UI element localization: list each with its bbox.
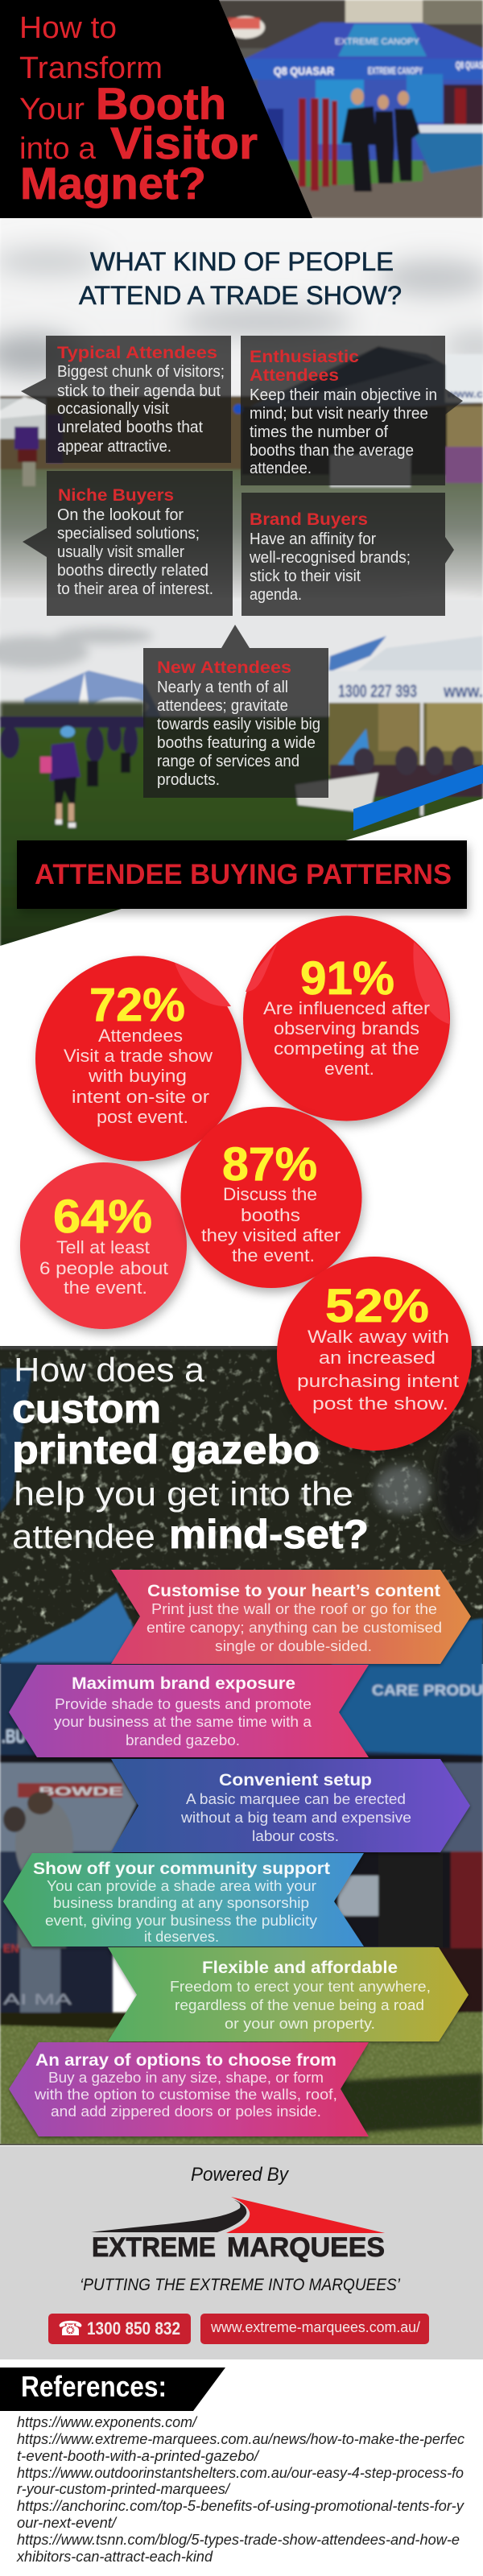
text: 87 percent: Discuss the <box>223 1184 317 1204</box>
text: reference links: xhibitors-can-attract-each-kind <box>16 2549 213 2565</box>
text: niche buyers: to their area of interest. <box>57 580 213 598</box>
button: phone: 1300 850 832 <box>87 2318 180 2339</box>
background photo: outdoor event: www.c <box>446 387 483 400</box>
heading: attendee buying patterns <box>17 840 467 909</box>
heading: custom printed gazebo question: mind-set? <box>169 1512 369 1557</box>
text: 91 percent: competing at the <box>274 1038 419 1059</box>
heading: enthusiastic attendees: Enthusiastic <box>250 348 359 366</box>
text: array of options <box>34 2070 337 2120</box>
text: customise: entire canopy; anything can be customised <box>147 1620 442 1636</box>
text: reference links: https://www.tsnn.com/blog/5-types-trade-show-attendees-and-how-e <box>17 2532 460 2548</box>
text: reference links: r-your-custom-printed-marquees/ <box>17 2481 231 2497</box>
title text: Magnet? <box>20 158 206 208</box>
heading: enthusiastic attendees <box>250 348 359 385</box>
text: 52 percent: Walk away with <box>308 1327 449 1347</box>
button: website: www.extreme-marquees.com.au/ <box>210 2319 420 2335</box>
background photo: outdoor event <box>0 218 483 959</box>
text: reference links <box>16 2414 464 2565</box>
panel: new attendees <box>143 625 328 798</box>
text: typical attendees: occasionally visit <box>57 400 169 418</box>
ribbon: customise <box>111 1570 471 1664</box>
text: reference links: our-next-event/ <box>17 2515 118 2531</box>
text: brand exposure: branded gazebo. <box>126 1732 240 1748</box>
heading: enthusiastic attendees: Attendees <box>250 366 339 385</box>
title text: How to <box>19 11 117 45</box>
ribbon: convenient setup: Convenient setup <box>219 1771 372 1790</box>
ribbon: customise: Customise to your heart’s content <box>147 1582 440 1600</box>
panel: enthusiastic attendees <box>241 336 463 485</box>
heading: niche buyers: Niche Buyers <box>58 486 174 505</box>
text: convenient setup: without a big team and expensive <box>180 1810 411 1826</box>
text: new attendees <box>157 679 320 789</box>
text: new attendees: products. <box>157 771 220 789</box>
circle: 91 percent <box>243 916 450 1121</box>
text: customise <box>147 1601 442 1654</box>
text: new attendees: range of services and <box>157 753 299 770</box>
text: niche buyers: specialised solutions; <box>57 525 200 543</box>
text: array of options: Buy a gazebo in any size, shape, or form <box>48 2070 324 2086</box>
text: 87 percent: the event. <box>232 1245 315 1265</box>
circle: 91 percent: 91% <box>300 952 394 1005</box>
text: community support <box>45 1878 317 1945</box>
text: enthusiastic attendees: booths than the average <box>250 442 414 460</box>
text: typical attendees: appear attractive. <box>57 438 171 456</box>
circle: 52 percent <box>277 1257 472 1451</box>
background photo: gazebo event <box>0 1346 483 2146</box>
header photo: trade show booth: Q8 QUASAR <box>274 64 334 77</box>
text: reference links: https://anchorinc.com/top-5-benefits-of-using-promotional-tents-for-y <box>17 2498 464 2514</box>
text: community support: event, giving your business the publicity <box>45 1913 317 1929</box>
text: niche buyers: On the lookout for <box>57 506 184 524</box>
text: flexible and affordable: regardless of the venue being a road <box>175 1997 424 2013</box>
text: convenient setup: labour costs. <box>252 1828 339 1844</box>
text: customise: Print just the wall or the roof or go for the <box>151 1601 437 1617</box>
text: 91 percent: Are influenced after <box>263 998 430 1018</box>
circle: 52 percent: 52% <box>325 1280 429 1332</box>
heading: custom printed gazebo question: printed gazebo <box>12 1427 320 1472</box>
title text <box>19 11 258 208</box>
heading: custom printed gazebo question <box>12 1351 369 1557</box>
text: community support: business branding at any sponsorship <box>53 1895 309 1911</box>
text: enthusiastic attendees: Keep their main objective in <box>250 386 437 404</box>
ribbon: array of options <box>9 2042 369 2136</box>
panel: niche buyers <box>23 471 233 616</box>
panel: footer <box>0 2146 483 2359</box>
text: brand exposure: Provide shade to guests and promote <box>55 1696 312 1712</box>
title text: into a <box>19 132 97 166</box>
text: enthusiastic attendees: times the number of <box>250 423 388 441</box>
panel: typical attendees <box>21 336 231 463</box>
header photo: trade show booth <box>217 0 483 218</box>
text: convenient setup <box>180 1791 411 1844</box>
heading: references <box>0 2368 225 2411</box>
panel: brand buyers <box>242 493 454 616</box>
text: community support: it deserves. <box>144 1929 219 1945</box>
header photo: trade show booth: EXTREME CANOPY <box>368 65 423 76</box>
text: brand buyers: agenda. <box>250 586 302 604</box>
text: brand buyers: stick to their visit <box>250 568 361 585</box>
background photo: gazebo event: CARE PRODU <box>372 1682 483 1699</box>
text: 72 percent: Attendees <box>98 1026 183 1046</box>
text: 91 percent <box>263 998 430 1079</box>
text: flexible and affordable: or your own property. <box>225 2016 375 2032</box>
text: new attendees: attendees; gravitate <box>157 697 288 715</box>
heading: custom printed gazebo question: custom <box>12 1386 161 1431</box>
accent band: blue diagonal <box>353 765 483 831</box>
text: convenient setup: A basic marquee can be erected <box>186 1791 406 1807</box>
text: 52 percent: purchasing intent <box>297 1371 459 1391</box>
text: niche buyers: booths directly related <box>57 562 208 580</box>
ribbon: brand exposure <box>9 1665 369 1757</box>
text: 52 percent <box>297 1327 459 1414</box>
text: community support: You can provide a shade area with your <box>47 1878 316 1894</box>
background photo: gazebo event: BOWDE <box>39 1785 123 1798</box>
text: new attendees: booths featuring a wide <box>157 734 316 752</box>
text: brand exposure: your business at the same time with a <box>54 1714 312 1730</box>
text: 64 percent: the event. <box>64 1278 147 1298</box>
text: 52 percent: an increased <box>319 1348 436 1368</box>
ribbon: community support: Show off your community support <box>33 1860 330 1878</box>
header photo: trade show booth: EXTREME CANOPY <box>335 37 420 47</box>
button: phone <box>48 2314 191 2344</box>
text: 91 percent: event. <box>324 1059 374 1079</box>
text: 72 percent: with buying <box>88 1066 187 1086</box>
title text: Transform <box>19 52 163 85</box>
text: enthusiastic attendees: mind; but visit nearly three <box>250 405 428 423</box>
circle: 72 percent: 72% <box>89 979 185 1031</box>
text: 64 percent: Tell at least <box>56 1237 150 1257</box>
heading: attendee buying patterns: ATTENDEE BUYING PATTERNS <box>35 859 452 890</box>
text: typical attendees: Biggest chunk of visitors; <box>57 363 225 381</box>
title text: Booth <box>96 78 226 129</box>
logo: extreme marquees: EXTREME <box>92 2232 216 2263</box>
heading: typical attendees: Typical Attendees <box>57 344 217 362</box>
heading: new attendees: New Attendees <box>157 658 291 677</box>
text: array of options: with the option to customise the walls, roof, <box>34 2087 337 2103</box>
text: typical attendees: stick to their agenda but <box>57 382 221 400</box>
circle: 87 percent: 87% <box>222 1138 317 1191</box>
text: 72 percent: intent on-site or <box>72 1087 209 1107</box>
text: enthusiastic attendees: attendee. <box>250 460 312 477</box>
background photo: gazebo event: EN <box>3 1942 19 1955</box>
ribbon: community support <box>3 1853 364 1946</box>
title panel <box>0 0 312 218</box>
text: niche buyers: usually visit smaller <box>57 543 184 561</box>
heading: custom printed gazebo question: How does a <box>14 1351 205 1389</box>
circle: 72 percent <box>35 956 242 1161</box>
ribbon: flexible and affordable <box>108 1947 469 2041</box>
heading: custom printed gazebo question: help you get into the <box>14 1475 353 1513</box>
text: reference links: https://www.extreme-marquees.com.au/news/how-to-make-the-perfec <box>17 2431 464 2447</box>
text: 64 percent <box>39 1237 168 1298</box>
text: enthusiastic attendees <box>250 386 437 477</box>
tagline: ‘PUTTING THE EXTREME INTO MARQUEES’ <box>80 2276 400 2294</box>
title text: Your <box>19 93 85 126</box>
ribbon: flexible and affordable: Flexible and affordable <box>202 1959 398 1977</box>
heading: what kind of people <box>79 247 402 310</box>
text: 52 percent: post the show. <box>312 1393 448 1414</box>
text: brand buyers: well-recognised brands; <box>249 549 411 567</box>
text: 87 percent: they visited after <box>201 1225 341 1245</box>
heading: what kind of people: ATTEND A TRADE SHOW? <box>79 281 402 310</box>
text: array of options: and add zippered doors or poles inside. <box>51 2103 321 2120</box>
text: flexible and affordable <box>170 1979 431 2032</box>
text: reference links: https://www.exponents.com/ <box>17 2414 198 2430</box>
background photo: gazebo event: AI MA <box>3 1992 72 2008</box>
circle: 87 percent <box>180 1107 362 1288</box>
heading: what kind of people: WHAT KIND OF PEOPLE <box>90 247 394 276</box>
heading: brand buyers: Brand Buyers <box>250 510 368 529</box>
logo: extreme marquees: MARQUEES <box>227 2232 385 2263</box>
text: flexible and affordable: Freedom to erect your tent anywhere, <box>170 1979 431 1995</box>
ribbon: convenient setup <box>111 1759 470 1852</box>
heading: custom printed gazebo question: attendee <box>12 1517 155 1555</box>
ribbon: array of options: An array of options to choose from <box>35 2051 336 2070</box>
text: 72 percent <box>64 1026 213 1127</box>
icon: telephone: ☎ <box>58 2317 83 2340</box>
ribbon: brand exposure: Maximum brand exposure <box>72 1674 295 1693</box>
text: brand exposure <box>54 1696 312 1748</box>
background photo: outdoor event: 1300 227 393 <box>338 681 417 701</box>
text: 87 percent: booths <box>241 1205 300 1225</box>
circle: 64 percent <box>20 1162 187 1329</box>
text: typical attendees <box>57 363 225 456</box>
text: 91 percent: observing brands <box>274 1018 419 1038</box>
title text: Visitor <box>110 118 258 168</box>
text: niche buyers <box>57 506 213 598</box>
text: brand buyers <box>249 530 411 604</box>
circle: 64 percent: 64% <box>53 1191 152 1243</box>
text: brand buyers: Have an affinity for <box>250 530 376 548</box>
text: new attendees: Nearly a tenth of all <box>157 679 288 696</box>
text: 64 percent: 6 people about <box>39 1258 168 1278</box>
text: reference links: t-event-booth-with-a-printed-gazebo/ <box>17 2448 260 2464</box>
text: 72 percent: Visit a trade show <box>64 1046 213 1066</box>
text: 72 percent: post event. <box>97 1107 188 1127</box>
text: customise: single or double-sided. <box>215 1638 372 1654</box>
text: 87 percent <box>201 1184 341 1265</box>
text: typical attendees: unrelated booths that <box>57 419 203 436</box>
background photo: gazebo event: .BU <box>2 1726 26 1748</box>
heading: references: References: <box>21 2370 167 2403</box>
button: website <box>200 2314 429 2344</box>
text: powered by: Powered By <box>191 2164 290 2186</box>
text: reference links: https://www.outdoorinstantshelters.com.au/our-easy-4-step-process-fo <box>17 2465 464 2481</box>
logo: extreme marquees <box>91 2197 385 2263</box>
text: new attendees: towards easily visible big <box>157 716 320 733</box>
